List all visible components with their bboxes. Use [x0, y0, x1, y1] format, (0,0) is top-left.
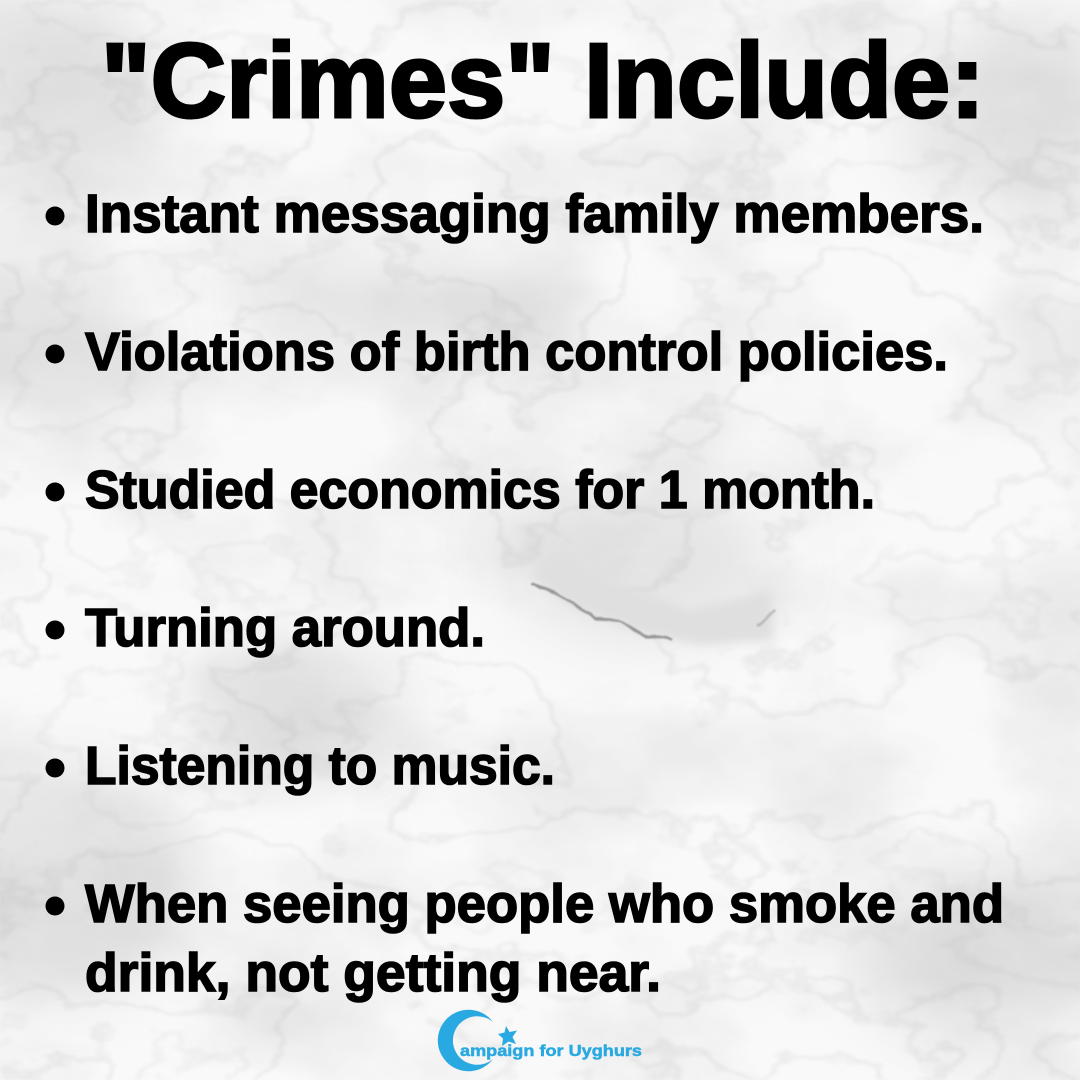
item: economics: Studied economics for 1 month. [85, 460, 875, 520]
crimes list [46, 184, 1004, 1003]
title: "Crimes" Include: [101, 22, 985, 140]
item: instant messaging: Instant messaging family members. [85, 184, 984, 244]
icon: crescent [438, 1010, 493, 1071]
logo: Campaign for Uyghurs [438, 1010, 642, 1071]
item: turning around: Turning around. [85, 598, 485, 658]
item: smoke and drink: drink, not getting near. [85, 943, 661, 1003]
icon: star [498, 1026, 517, 1046]
item: listening to music: Listening to music. [85, 736, 555, 796]
logo text: ampaign for Uyghurs [460, 1043, 642, 1060]
item: smoke and drink: When seeing people who smoke and [85, 874, 1004, 934]
item: birth control: Violations of birth control policies. [85, 322, 948, 382]
item: smoke and drink [46, 874, 1004, 1003]
